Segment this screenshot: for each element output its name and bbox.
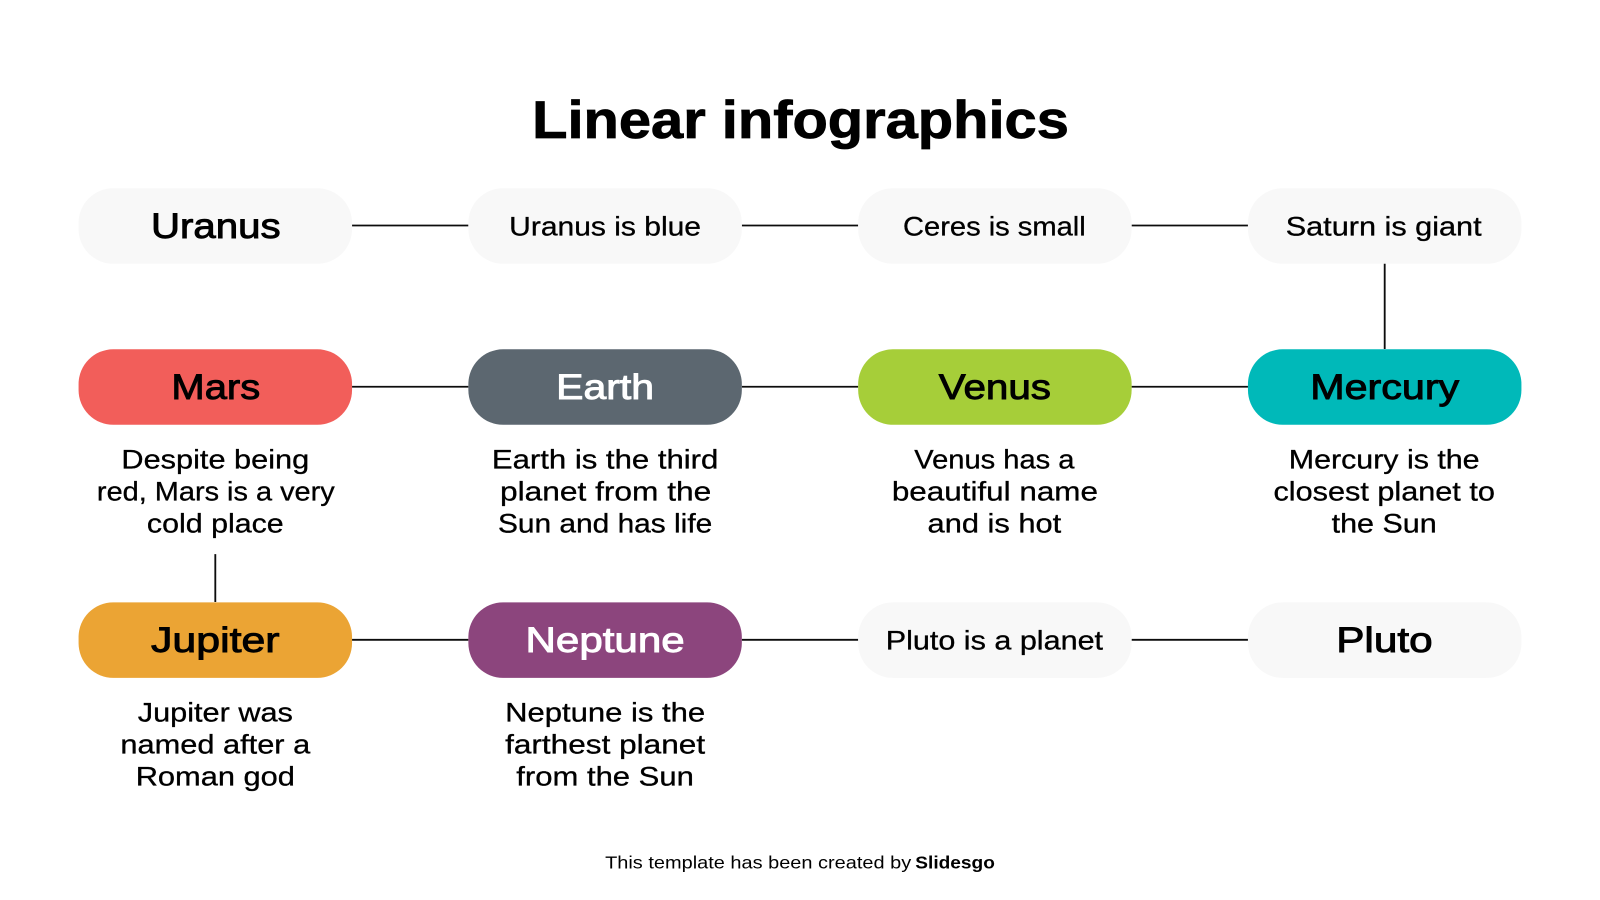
- pill: Uranus is blue: Uranus is blue: [509, 212, 701, 242]
- pill: Mars: [79, 349, 352, 425]
- pill: Earth: [468, 349, 742, 425]
- pill: Pluto is a planet: [858, 602, 1132, 678]
- text: Venus description: beautiful name: [892, 477, 1098, 507]
- text: Mars description: Despite being: [121, 444, 309, 474]
- text: Jupiter description: [120, 697, 310, 792]
- text: Mercury description: the Sun: [1332, 509, 1437, 539]
- pill: Pluto: Pluto: [1336, 621, 1433, 660]
- pill: Mars: Mars: [171, 368, 260, 407]
- pill: Venus: [858, 349, 1132, 425]
- pill: Jupiter: [79, 602, 352, 678]
- text: Mars description: cold place: [147, 509, 284, 539]
- text: Jupiter description: named after a: [120, 730, 310, 760]
- text: Earth description: Sun and has life: [498, 509, 712, 539]
- pill: Earth: Earth: [556, 368, 654, 407]
- text: Venus description: [892, 444, 1098, 539]
- text: Neptune description: Neptune is the: [505, 697, 705, 727]
- title: Linear infographics: [532, 91, 1069, 150]
- text: Mars description: red, Mars is a very: [97, 477, 335, 507]
- text: Jupiter description: Jupiter was: [138, 697, 293, 727]
- pill: Jupiter: Jupiter: [151, 621, 280, 660]
- text: Neptune description: [505, 697, 706, 792]
- text: Neptune description: farthest planet: [505, 730, 706, 760]
- footer credit: Slidesgo: [915, 852, 995, 872]
- text: Mercury description: Mercury is the: [1289, 444, 1480, 474]
- pill: Uranus: [79, 188, 352, 264]
- text: Earth description: Earth is the third: [492, 444, 718, 474]
- pill: Uranus: Uranus: [151, 207, 281, 246]
- pill: Saturn is giant: Saturn is giant: [1286, 212, 1482, 242]
- pill: Neptune: Neptune: [526, 621, 685, 660]
- pill: Pluto: [1248, 602, 1521, 678]
- text: Mercury description: [1273, 444, 1495, 539]
- pill: Saturn is giant: [1248, 188, 1521, 264]
- text: Mercury description: closest planet to: [1273, 477, 1495, 507]
- text: Earth description: planet from the: [500, 477, 711, 507]
- pill: Pluto is a planet: Pluto is a planet: [886, 625, 1104, 655]
- text: Jupiter description: Roman god: [136, 762, 295, 792]
- pill: Mercury: [1248, 349, 1521, 425]
- text: Earth description: [492, 444, 718, 539]
- text: Venus description: Venus has a: [914, 444, 1075, 474]
- pill: Uranus is blue: [468, 188, 742, 264]
- text: Mars description: [97, 444, 335, 539]
- text: Venus description: and is hot: [928, 509, 1062, 539]
- footer credit: This template has been created by: [605, 852, 911, 872]
- pill: Neptune: [468, 602, 742, 678]
- text: Neptune description: from the Sun: [516, 762, 694, 792]
- pill: Ceres is small: Ceres is small: [903, 212, 1086, 242]
- connector lines: [215, 226, 1385, 640]
- pill: Ceres is small: [858, 188, 1132, 264]
- pill: Venus: Venus: [939, 368, 1051, 407]
- pill: Mercury: Mercury: [1310, 368, 1460, 407]
